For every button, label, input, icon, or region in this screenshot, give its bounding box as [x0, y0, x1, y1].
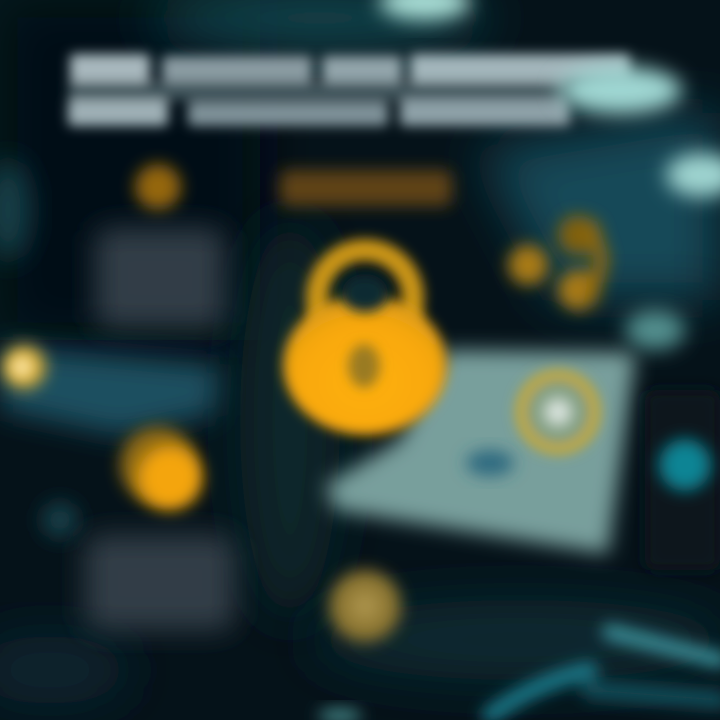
panel: lower gray card: [85, 535, 235, 630]
title: [68, 54, 630, 126]
icon: yellow dot: [2, 345, 46, 389]
padlock shackle: [317, 250, 413, 346]
icon: share nodes: [508, 215, 602, 310]
panel: upper gray card: [95, 228, 225, 328]
icon: tan circle: [329, 570, 401, 642]
padlock hole: [342, 274, 388, 312]
padlock keyhole: [348, 344, 380, 388]
bottom right streaks: [490, 632, 720, 715]
top glow: [379, 0, 471, 20]
icon: small teal left blob: [42, 502, 78, 538]
panel: right dark device: [645, 390, 720, 570]
title highlight glow: [558, 66, 682, 114]
bottom glow: [318, 708, 362, 720]
icon: small teal blob: [625, 310, 685, 350]
icon: orange dot: [135, 164, 181, 210]
panel: laptop screen: [325, 350, 636, 554]
right glow: [666, 153, 720, 197]
panel: teal left band: [0, 345, 220, 435]
icon: padlock: [283, 250, 447, 435]
padlock body: [283, 295, 447, 435]
icon: teal dot: [659, 439, 711, 491]
icon: yellow ring: [521, 375, 595, 449]
icon: blue blob: [466, 450, 514, 476]
icon: orange blob: [120, 427, 202, 510]
heading: orange label: [280, 170, 452, 206]
